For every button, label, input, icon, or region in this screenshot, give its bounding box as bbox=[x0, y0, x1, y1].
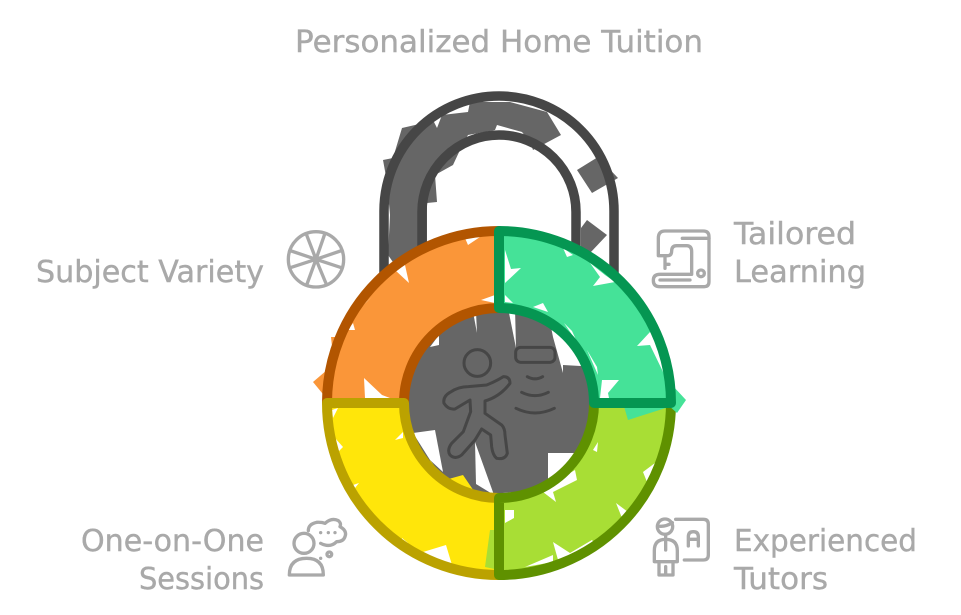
centre hub bbox=[404, 308, 598, 502]
label: one-on-one sessions: Sessions bbox=[139, 562, 264, 597]
icon: person thinking bbox=[289, 519, 346, 575]
shackle outline bbox=[384, 96, 614, 280]
lock shackle bbox=[383, 96, 618, 280]
icon: sewing machine bbox=[653, 231, 709, 287]
segment: one-on-one sessions bbox=[327, 403, 499, 575]
icon: wheel bbox=[288, 232, 344, 287]
icon: person with sensor bbox=[444, 347, 555, 459]
shackle rough fill bbox=[383, 102, 618, 265]
segment: experienced tutors bbox=[485, 403, 671, 575]
label: experienced tutors bbox=[733, 524, 917, 597]
title: Personalized Home Tuition bbox=[295, 25, 703, 60]
label: tailored learning bbox=[733, 217, 866, 290]
label: subject variety: Subject Variety bbox=[36, 255, 264, 290]
segment: tailored learning bbox=[499, 231, 686, 420]
label: one-on-one sessions bbox=[81, 524, 264, 597]
label: one-on-one sessions: One-on-One bbox=[81, 524, 264, 559]
label: tailored learning: Learning bbox=[734, 255, 866, 290]
segment: subject variety bbox=[313, 231, 499, 403]
hub white gaps bbox=[413, 308, 598, 502]
label: experienced tutors: Experienced bbox=[734, 524, 917, 559]
icon: teacher at board bbox=[654, 519, 708, 575]
label: tailored learning: Tailored bbox=[733, 217, 856, 252]
label: experienced tutors: Tutors bbox=[733, 562, 828, 597]
